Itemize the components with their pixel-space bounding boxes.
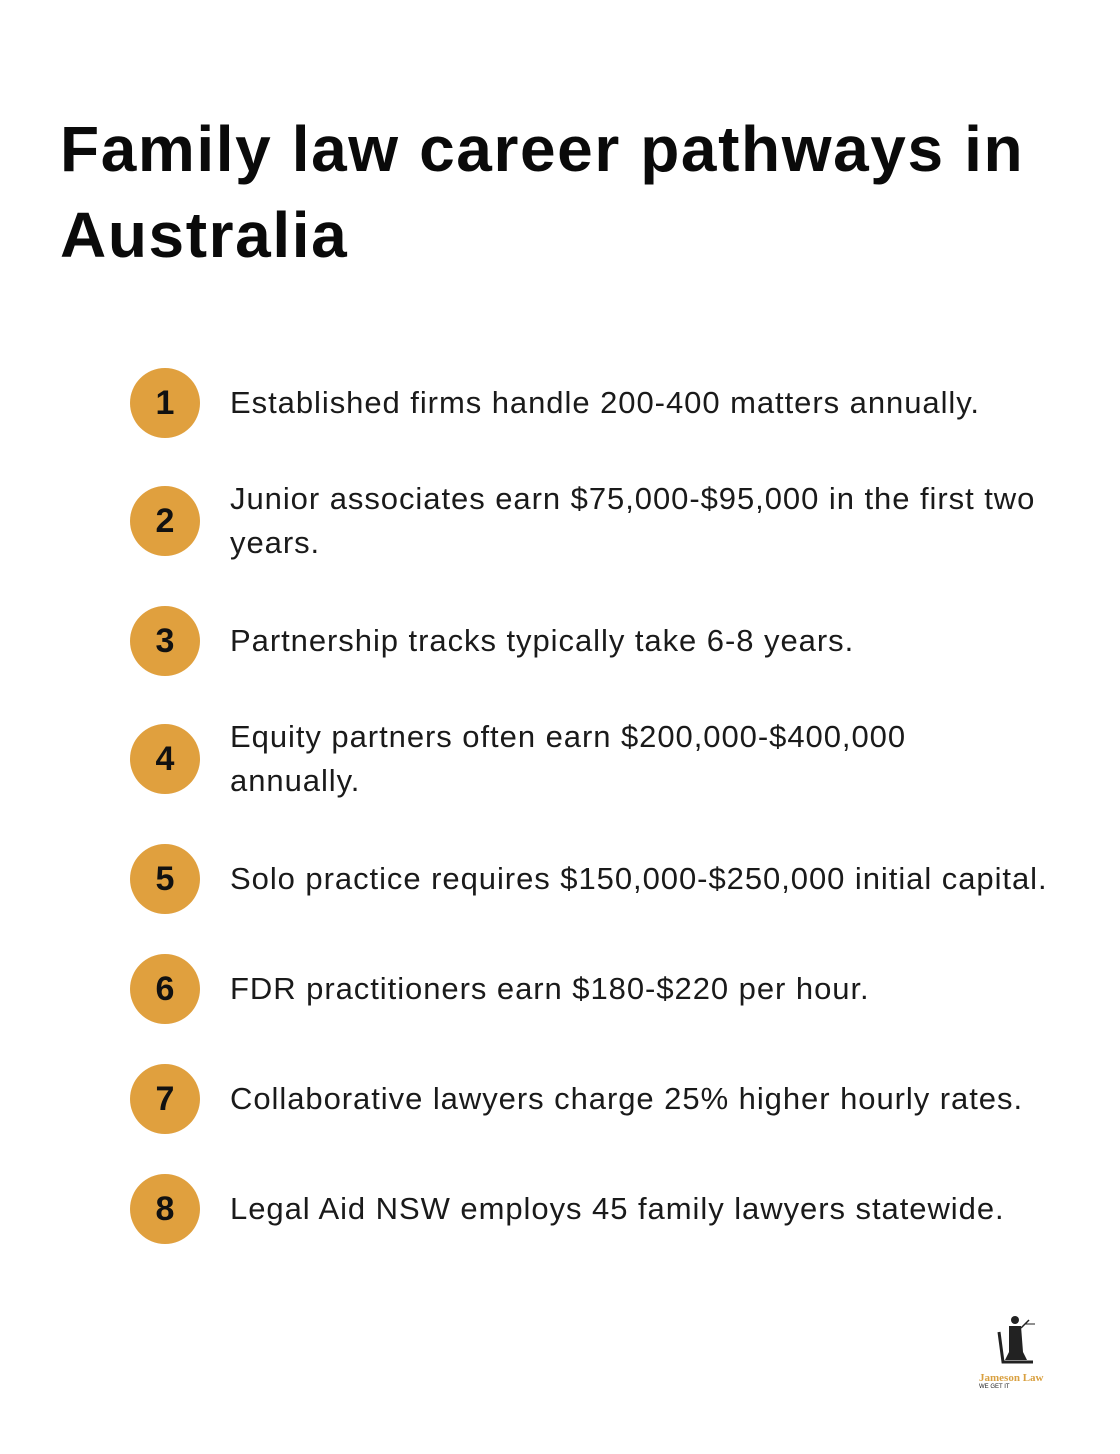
item 8: 8: [156, 1190, 174, 1228]
item 1: 1: [156, 384, 174, 422]
item 4: annually.: [230, 763, 360, 798]
item 4: Equity partners often earn $200,000-$400,000: [230, 719, 906, 754]
item 4: 4: [156, 740, 174, 778]
item 2: Junior associates earn $75,000-$95,000 in the first two: [230, 481, 1035, 516]
title: Australia: [60, 199, 348, 271]
title: [60, 113, 1024, 271]
item 6: 6: [156, 970, 174, 1008]
item 7: 7: [156, 1080, 174, 1118]
item 7: Collaborative lawyers charge 25% higher hourly rates.: [230, 1081, 1023, 1116]
item 3: [130, 606, 854, 676]
item 2: years.: [230, 525, 320, 560]
item 4: [130, 719, 906, 798]
item 3: Partnership tracks typically take 6-8 years.: [230, 623, 854, 658]
item 5: 5: [156, 860, 174, 898]
item 3: 3: [156, 622, 174, 660]
item 8: Legal Aid NSW employs 45 family lawyers statewide.: [230, 1191, 1005, 1226]
item 5: Solo practice requires $150,000-$250,000 initial capital.: [230, 861, 1048, 896]
logo: WE GET IT: [979, 1384, 1010, 1390]
item 7: [130, 1064, 1023, 1134]
title: Family law career pathways in: [60, 113, 1024, 185]
item 5: [130, 844, 1048, 914]
item 2: 2: [156, 502, 174, 540]
item 8: [130, 1174, 1005, 1244]
item 6: FDR practitioners earn $180-$220 per hour.: [230, 971, 870, 1006]
item 1: [130, 368, 980, 438]
logo: Jameson Law: [979, 1372, 1043, 1384]
item 6: [130, 954, 870, 1024]
item 1: Established firms handle 200-400 matters annually.: [230, 385, 980, 420]
item 2: [130, 481, 1035, 560]
logo: [979, 1316, 1044, 1390]
